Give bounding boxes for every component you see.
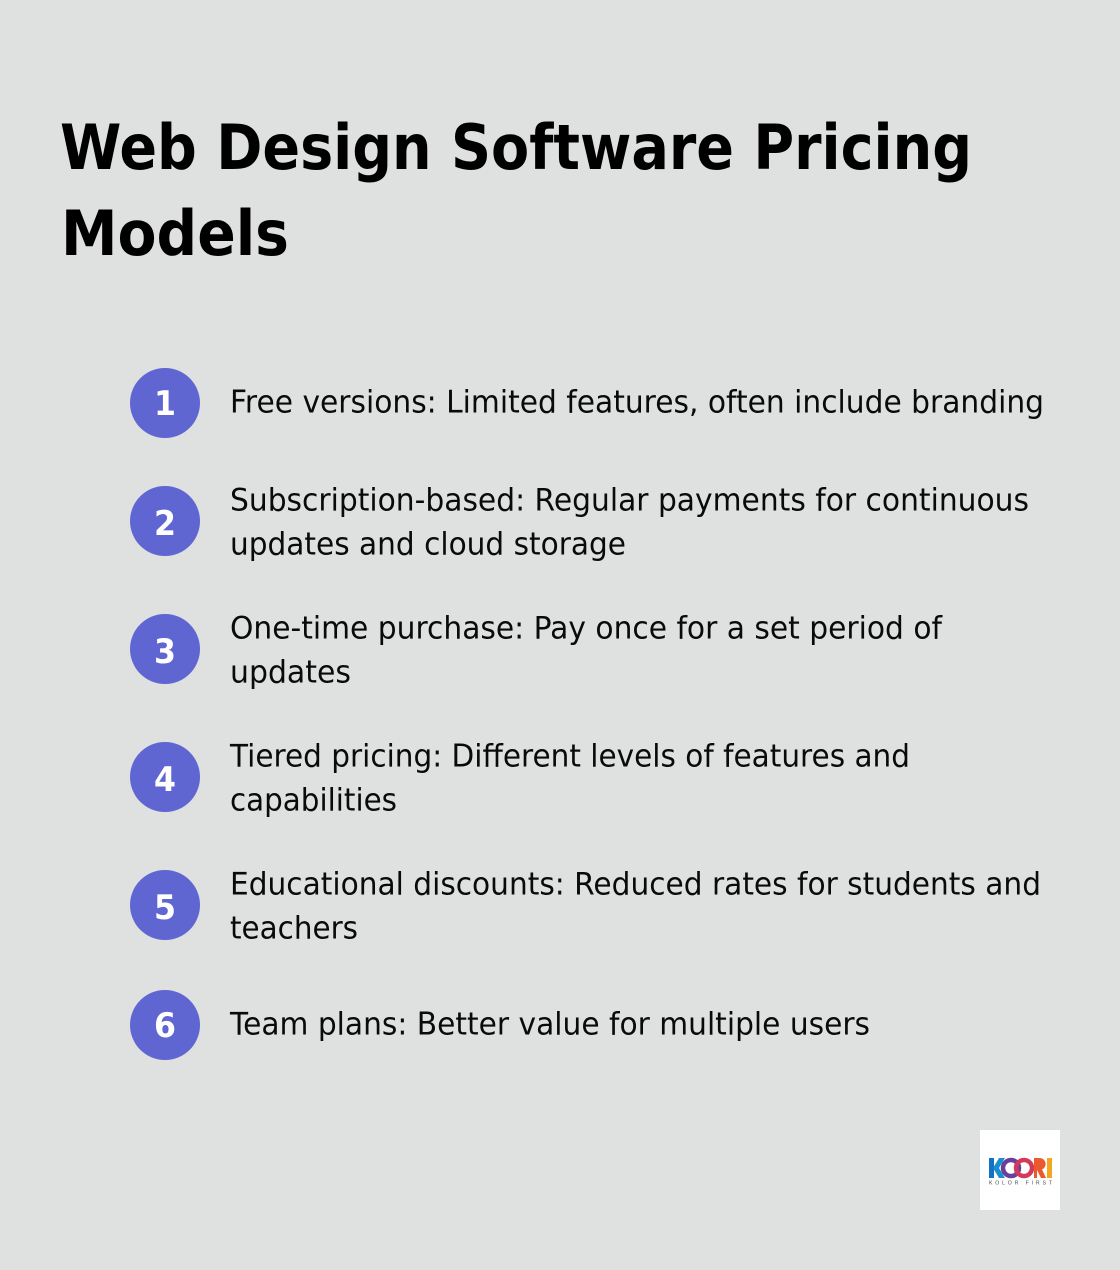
title bbox=[60, 111, 972, 270]
list item 3: One-time purchase: Pay once for a set period of bbox=[230, 610, 943, 646]
list item 4: Tiered pricing: Different levels of features and bbox=[229, 738, 910, 774]
list item 6: 6 bbox=[154, 1006, 176, 1046]
list item 1: 1 bbox=[154, 384, 176, 424]
list item 2 bbox=[130, 482, 1029, 562]
title: Models bbox=[61, 197, 289, 270]
logo: Koor1 Kolor First bbox=[980, 1130, 1060, 1210]
list item 4 bbox=[130, 738, 910, 818]
list item 3: updates bbox=[230, 654, 351, 690]
title: Web Design Software Pricing bbox=[60, 111, 972, 184]
logo: Koor1 Kolor First: KOLOR FIRST bbox=[989, 1180, 1052, 1186]
list item 5 bbox=[130, 866, 1041, 946]
list item 1: Free versions: Limited features, often include branding bbox=[230, 384, 1044, 420]
list item 2: Subscription-based: Regular payments for continuous bbox=[230, 482, 1029, 518]
list item 5: Educational discounts: Reduced rates for students and bbox=[230, 866, 1041, 902]
list item 3: 3 bbox=[154, 632, 176, 672]
list item 3 bbox=[130, 610, 943, 690]
list item 4: 4 bbox=[154, 760, 176, 800]
list item 6 bbox=[130, 990, 870, 1060]
list item 5: 5 bbox=[154, 888, 176, 928]
list item 2: updates and cloud storage bbox=[230, 526, 626, 562]
list item 1 bbox=[130, 368, 1044, 438]
list item 6: Team plans: Better value for multiple users bbox=[229, 1006, 870, 1042]
list item 5: teachers bbox=[230, 910, 358, 946]
list item 2: 2 bbox=[154, 504, 176, 544]
list item 4: capabilities bbox=[230, 782, 397, 818]
